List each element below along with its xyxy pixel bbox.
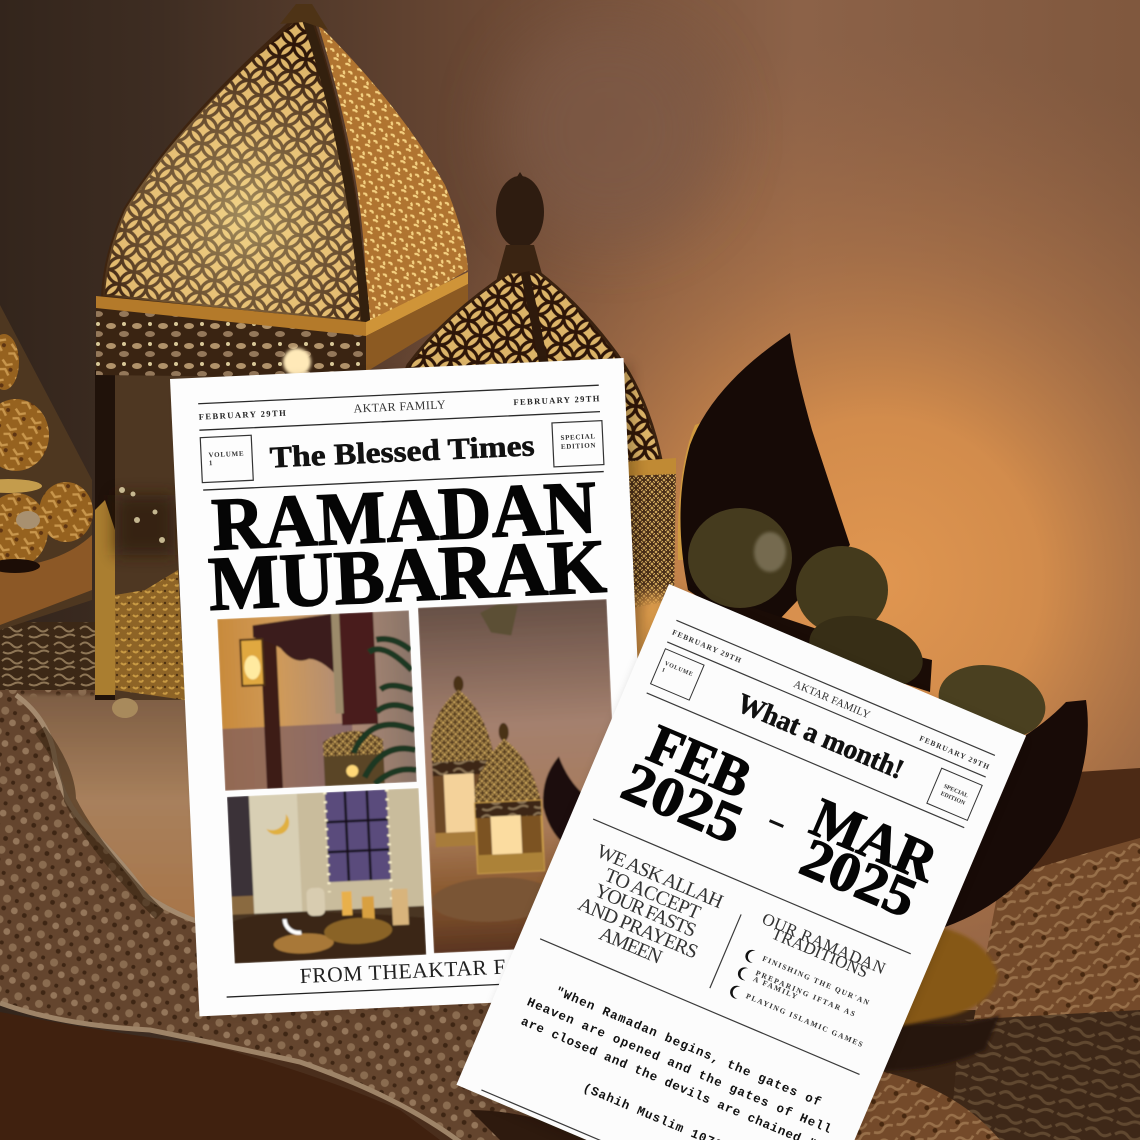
lantern ornamental band (96, 272, 468, 378)
rules (477, 620, 995, 1140)
dome (395, 272, 664, 475)
prayer text: WE ASK ALLAH (593, 840, 726, 913)
chocolate 3 (801, 604, 931, 700)
box: volume: 1 (661, 667, 666, 674)
chocolate 4 (932, 656, 1052, 748)
lantern glass body (95, 370, 370, 718)
box: special edition: SPECIAL (560, 432, 596, 442)
date block right: MAR (802, 787, 947, 895)
background: lace runner right (820, 838, 1140, 1140)
crescent bowl with chocolates (678, 333, 1088, 1030)
box: volume (651, 649, 704, 700)
box: volume: VOLUME (208, 450, 244, 459)
family name: AKTAR FAMILY (792, 678, 872, 721)
lantern dome top (280, 4, 328, 30)
headline (204, 466, 608, 627)
traditions heading: OUR RAMADAN (759, 909, 888, 978)
glass jar of chocolates (0, 305, 93, 630)
shadow of back card (462, 590, 1022, 1140)
dome glow (103, 20, 363, 322)
prayer text: YOUR FASTS (591, 880, 699, 942)
date left: FEBRUARY 29TH (671, 628, 743, 665)
footer line text: FROM THEAKTAR FAMILY (299, 951, 576, 988)
shadow of front card (180, 364, 661, 1012)
masthead: The Blessed Times (269, 429, 535, 474)
date block left (613, 709, 769, 856)
prayer text (564, 840, 726, 982)
box: special edition: EDITION (561, 441, 596, 451)
date left: FEBRUARY 29TH (199, 408, 286, 422)
panel: tilted newspaper card (456, 584, 1026, 1140)
traditions heading: TRADITIONS (769, 924, 871, 982)
box: special edition: SPECIAL (943, 784, 969, 799)
crescent front (880, 700, 1088, 927)
bowl base (880, 925, 998, 1030)
photo: hanging lantern corner (217, 610, 417, 791)
lantern body side (622, 458, 678, 676)
date block left: 2025 (613, 751, 751, 856)
quote: Heaven are opened and the gates of Hell (525, 995, 833, 1137)
date block right (786, 787, 947, 932)
box: special edition (552, 421, 604, 467)
lantern dome right face (318, 24, 468, 322)
gold rim reflection (678, 415, 722, 560)
chocolate shadow (700, 590, 932, 692)
family name: AKTAR FAMILY (353, 397, 446, 416)
date right: FEBRUARY 29TH (918, 734, 991, 771)
item text: A FAMILY (752, 974, 799, 1001)
box: volume: VOLUME (663, 661, 693, 678)
large lantern (95, 4, 468, 718)
item text: FINISHING THE QUR'AN (761, 954, 871, 1007)
chocolate 1 (688, 508, 792, 608)
date block right: 2025 (792, 827, 925, 930)
lantern dome left face (103, 18, 363, 322)
headline: MUBARAK (207, 523, 608, 627)
date right: FEBRUARY 29TH (513, 393, 600, 407)
small lantern (395, 172, 678, 676)
icon: crescent (736, 965, 750, 981)
crescent back (680, 333, 850, 640)
chocolate 2 (796, 546, 888, 634)
footer rule (227, 978, 628, 997)
quote: "When Ramadan begins, the gates of (553, 985, 823, 1110)
prayer text: AND PRAYERS (575, 893, 701, 963)
box: special edition (927, 768, 982, 820)
lantern dome centre rib (306, 18, 366, 325)
photo: decorated window (226, 788, 426, 964)
item text: PLAYING ISLAMIC GAMES (745, 991, 864, 1049)
date block left: FEB (639, 713, 760, 811)
icon: crescent (728, 984, 742, 1000)
background: wooden table (0, 768, 1140, 1140)
traditions list (728, 947, 880, 1051)
photo: lanterns on table (418, 599, 612, 954)
icon: crescent (743, 948, 757, 964)
headline: RAMADAN (210, 466, 598, 567)
item text (745, 954, 880, 1049)
prayer text: TO ACCEPT (601, 864, 704, 924)
item text: PREPARING IFTAR AS (754, 968, 856, 1018)
finial (495, 172, 545, 285)
background: lace runner left (0, 622, 600, 1140)
heading: What a month! (732, 688, 908, 786)
panel: front newspaper card (170, 358, 653, 1016)
box: volume: 1 (209, 459, 213, 467)
prayer text: AMEEN (596, 923, 665, 969)
box: volume (200, 435, 253, 483)
box: special edition: EDITION (939, 791, 966, 807)
dash (769, 819, 784, 828)
header rules (198, 385, 604, 490)
